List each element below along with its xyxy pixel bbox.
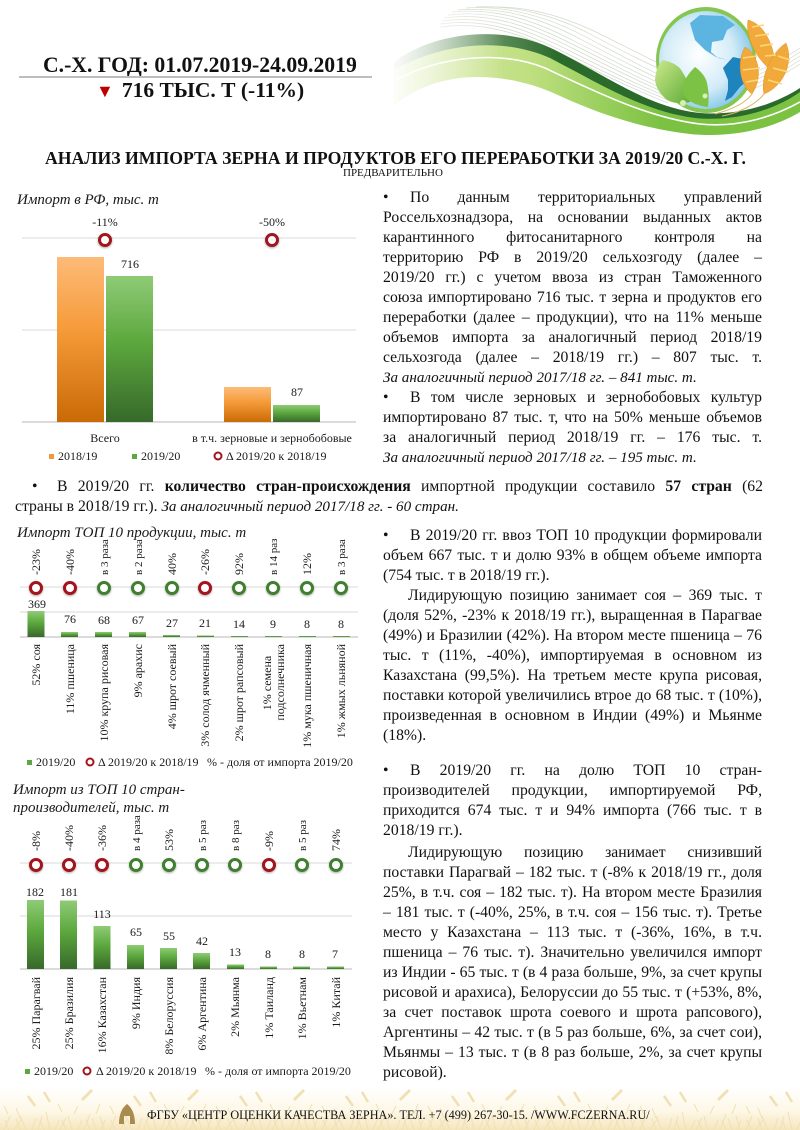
value labels [26,885,338,961]
text block: top 10 products: (754 тыс. т в 2018/19 гг.). [383,567,550,584]
text block: top 10 countries: Аргентины – 42 тыс. т (в 5 раз больше, 6%, за счет сои), [383,1024,762,1041]
text block: import overview: 2019/20 гг.) с учетом ввоза из стран Таможенного [383,269,762,286]
legend: 2019/20 [141,449,180,463]
text block: import overview: • [383,389,388,406]
text block: top 10 countries: за счет поставок шрота соевого и шрота рапсового), [383,1004,762,1021]
category labels: 1% жмых льняной [334,643,348,738]
chart title: Импорт из ТОП 10 стран- [12,782,185,798]
text block: countries of origin [15,478,763,515]
text block: top 10 countries: производителей продукции, импортируемой РФ, [383,782,762,799]
legend: 2019/20 [36,755,75,769]
legend: 2018/19 [58,449,97,463]
text block: top 10 countries: Лидирующую позицию занимает снизивший [408,844,762,861]
category labels: 16% Казахстан [95,976,109,1053]
text block: import overview: импортировано 87 тыс. т, что на 50% меньше объемов [383,409,762,426]
value labels: 369 [28,597,46,611]
category labels: 1% Вьетнам [295,977,309,1039]
text block: import overview: • [383,189,388,206]
text block: import overview: В том числе зерновых и зернобобовых культур [410,389,762,406]
category labels: 4% шрот соевый [165,643,179,729]
text block: top 10 countries: Мьянмы – 13 тыс. т (в 8 раз больше, 2%, за счет крупы [383,1044,762,1061]
value labels: в т.ч. зерновые и зернобобовые [192,431,352,445]
change labels: -23% [29,549,43,575]
category labels: 2% шрот рапсовый [232,643,246,741]
change labels: -40% [62,825,76,851]
value labels: 68 [98,613,110,627]
change labels: в 5 раз [197,820,209,851]
change markers [30,860,342,870]
value labels: -11% [92,215,118,229]
value labels: 716 [121,257,139,271]
title: АНАЛИЗ ИМПОРТА ЗЕРНА И ПРОДУКТОВ ЕГО ПЕРЕРАБОТКИ ЗА 2019/20 С.-Х. Г. [45,148,746,168]
value labels: 67 [132,613,144,627]
category labels: 6% Аргентина [195,976,209,1051]
text block: top 10 countries: из Индии - 65 тыс. т (в 4 раза больше, 9%, за счет крупы [383,964,762,981]
value labels: 8 [299,947,305,961]
value labels: 65 [130,925,142,939]
text block: top 10 countries: – 181 тыс. т (-40%, 25%, в т.ч. соя – 156 тыс. т). Третье [383,904,762,921]
change labels: -9% [262,831,276,851]
text block: import overview: По данным территориальных управлений [410,189,762,206]
value labels: Всего [90,431,120,445]
text block: top 10 products: (18%). [383,727,426,744]
legend: % - доля от импорта 2019/20 [205,1064,351,1078]
text block: top 10 countries [382,762,762,1081]
value labels: 27 [166,616,178,630]
change markers [30,582,346,594]
text block: top 10 countries: 25%, в т.ч. соя – 182 тыс. т). На втором месте Бразилия [383,884,762,901]
footer: wheat field band [0,1089,800,1130]
value labels: 87 [291,385,303,399]
value labels: 42 [196,934,208,948]
change labels: -40% [63,549,77,575]
category labels [29,643,348,748]
category labels: 2% Мьянма [228,976,242,1037]
chart title: производителей, тыс. т [13,800,169,816]
change labels: в 3 раза [336,539,348,575]
icon: wheat ears [715,20,790,116]
category labels: 8% Белоруссия [162,977,176,1055]
text block: top 10 products: • [383,527,388,544]
category labels: 1% Таиланд [262,977,276,1039]
text block: top 10 countries: рисовой). [383,1064,447,1081]
text block: top 10 products: (49%) и Бразилии (42%). На втором месте пшеница – 76 [383,627,762,644]
text block: top 10 countries: • [383,762,388,779]
text block: top 10 countries: 2018/19 гг.). [383,822,463,839]
value labels [28,597,344,631]
legend [25,1064,351,1078]
change labels: 53% [162,829,176,851]
category labels: 9% Индия [129,977,143,1029]
text block: top 10 countries: пшеница – 76 тыс. т). Значительно увеличился импорт [383,944,762,961]
value labels: 113 [93,907,111,921]
value labels: 9 [270,617,276,631]
text block: import overview: карантинного фитосанитарного контроля на [383,229,762,246]
change labels: -26% [198,549,212,575]
legend: 2019/20 [34,1064,73,1078]
category labels: 1% Китай [329,976,343,1028]
legend [27,755,353,769]
change labels [29,815,343,851]
value labels: 182 [26,885,44,899]
text block: import overview: За аналогичный период 2017/18 гг. – 195 тыс. т. [383,450,697,466]
footer contact text: ФГБУ «ЦЕНТР ОЦЕНКИ КАЧЕСТВА ЗЕРНА». ТЕЛ. +7 (499) 267-30-15. /WWW.FCZERNA.RU/ [147,1108,650,1122]
chart title: Импорт ТОП 10 продукции, тыс. т [16,525,246,541]
text block: countries of origin: В 2019/20 гг. количество стран-происхождения импортной продукции составило 57 стран (62 [57,478,763,495]
text block: top 10 products: объем 667 тыс. т и долю 93% в общем объеме импорта [383,547,762,564]
value labels: 8 [338,617,344,631]
category labels: 52% соя [29,644,43,686]
text block: top 10 products [383,527,762,744]
change labels: -36% [95,825,109,851]
text block: top 10 products: (доля 52%, -23% к 2018/19 гг.), выращенная в Парагвае [383,607,762,624]
change labels: в 3 раза [99,539,111,575]
change labels: в 14 раз [268,539,280,575]
category labels: 11% пшеница [63,643,77,714]
change labels: в 4 раза [131,815,143,851]
category labels: 25% Бразилия [62,977,76,1049]
value labels: 13 [229,945,241,959]
value labels [90,215,352,445]
legend [49,449,327,463]
legend: % - доля от импорта 2019/20 [207,755,353,769]
text block: top 10 countries: приходится 674 тыс. т и 94% импорта (766 тыс. т в [383,802,762,819]
text block: top 10 products: тыс. т (11%, -40%), импортируемая в основном из [383,647,762,664]
category labels: 9% арахис [131,644,145,697]
value labels: 21 [199,616,211,630]
text block: import overview [383,189,762,466]
change labels: в 5 раз [297,820,309,851]
divider line under period [19,76,372,78]
change labels: 12% [300,553,314,575]
category labels: 1% семена [260,655,274,710]
value labels: 14 [233,617,245,631]
subtitle: ПРЕДВАРИТЕЛЬНО [343,167,443,179]
text block: top 10 countries: поставки Парагвай – 182 тыс. т (-8% к 2018/19 гг., доля [383,864,762,881]
value labels: 7 [332,947,338,961]
category labels: 10% крупа рисовая [97,644,111,742]
category labels: 1% мука пшеничная [300,644,314,748]
legend: Δ 2019/20 к 2018/19 [96,1064,197,1078]
text block: top 10 products: поставки которой увеличились втрое до 68 тыс. т (10%), [383,687,762,704]
headline value: ▼ 716 ТЫС. Т (-11%) [96,78,304,102]
text block: top 10 products: В 2019/20 гг. ввоз ТОП 10 продукции формировали [410,527,762,544]
change labels: в 8 раз [230,820,242,851]
text block: countries of origin: страны в 2018/19 гг.). За аналогичный период 2017/18 гг. - 60 стран. [15,498,459,515]
value labels: 55 [163,929,175,943]
text block: top 10 products: Лидирующую позицию занимает соя – 369 тыс. т [408,587,762,604]
text block: top 10 products: произведенная в основном в Индии (49%) и Мьянме [383,707,762,724]
value labels: 8 [304,617,310,631]
text block: top 10 countries: В 2019/20 гг. на долю ТОП 10 стран- [410,762,762,779]
category labels [29,976,343,1055]
text block: import overview: сельхозгода (далее – 2018/19 гг.) – 807 тыс. т. [383,349,762,366]
text block: import overview: союза импортировано 716 тыс. т зерна и продуктов его [383,289,762,306]
text block: import overview: За аналогичный период 2017/18 гг. – 841 тыс. т. [383,370,697,386]
text block: import overview: за аналогичный период 2018/19 гг. – 176 тыс. т. [383,429,762,446]
text block: import overview: Россельхознадзора, на основании выданных актов [383,209,762,226]
header period: С.-Х. ГОД: 01.07.2019-24.09.2019 [43,53,357,77]
category labels: 25% Парагвай [29,976,43,1050]
category labels: подсолнечника [273,643,287,721]
chart title: Импорт в РФ, тыс. т [16,192,159,208]
text block: import overview: переработки (далее – продукции), что на 11% меньше [383,309,762,326]
change labels: 40% [165,553,179,575]
text block: import overview: территорию РФ в 2019/20 сельхозгоду (далее – [383,249,762,266]
change labels: -8% [29,831,43,851]
change labels: 92% [232,553,246,575]
change labels: 74% [329,829,343,851]
icon: globe [655,7,756,113]
icon: footer logo [119,1104,135,1124]
change labels [29,539,348,575]
value labels: -50% [259,215,285,229]
value labels: 76 [64,612,76,626]
text block: top 10 products: Казахстана (99,5%). На третьем месте крупа рисовая, [383,667,762,684]
change markers [100,234,278,246]
banner: green wave with globe and wheat [396,6,800,135]
value labels: 8 [265,947,271,961]
text block: top 10 countries: место у Казахстана – 113 тыс. т (-36%, 16%, в т.ч. [383,924,762,941]
legend: Δ 2019/20 к 2018/19 [98,755,199,769]
text block: import overview: объемов импорта за аналогичный период 2018/19 [383,329,762,346]
legend: Δ 2019/20 к 2018/19 [226,449,327,463]
change labels: в 2 раза [133,539,145,575]
bars [27,900,344,969]
bars [28,611,350,637]
value labels: 181 [60,885,78,899]
text block: countries of origin: • [32,478,38,495]
bars [57,257,320,422]
category labels: 3% солод ячменный [198,643,212,747]
text block: top 10 countries: рисовой и арахиса), Белоруссии до 55 тыс. т (+53%, 8%, [383,984,762,1001]
